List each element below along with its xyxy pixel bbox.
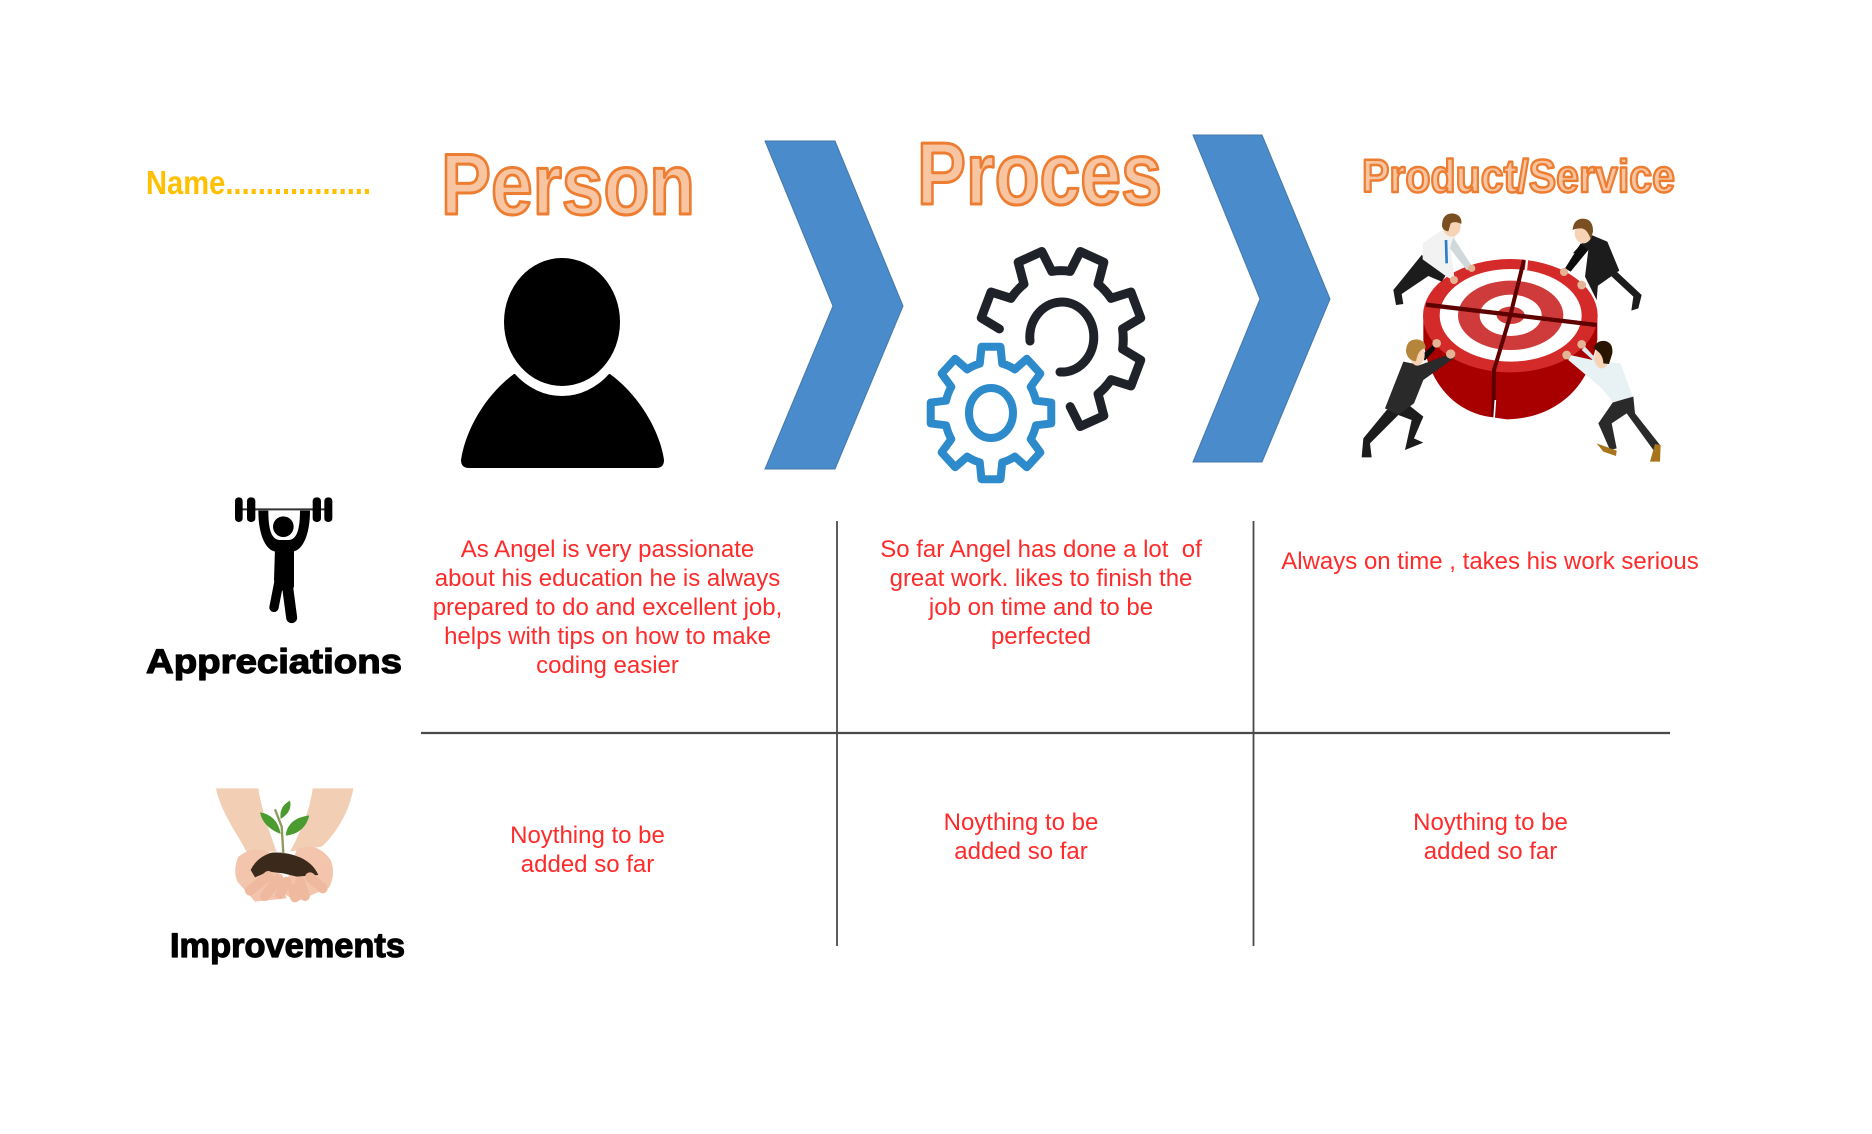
heading: Person: Person <box>441 137 695 233</box>
text: person appreciation: about his education he is always <box>435 565 780 592</box>
arrow: chevron two <box>1193 135 1330 462</box>
icon: team pushing target <box>1362 213 1661 462</box>
text: person appreciation: prepared to do and excellent job, <box>433 594 782 621</box>
text: person appreciation: As Angel is very passionate <box>461 536 754 563</box>
text: process appreciation: job on time and to be <box>928 594 1153 621</box>
text: process improvement: Noything to be <box>944 809 1098 836</box>
text: process appreciation: So far Angel has done a lot of <box>880 536 1202 563</box>
heading: Proces: Proces <box>917 124 1162 223</box>
text: product appreciation: Always on time , takes his work serious <box>1281 548 1699 575</box>
text: process appreciation: great work. likes to finish the <box>890 565 1192 592</box>
figure: bottom right man <box>1562 340 1661 462</box>
target face <box>1423 259 1598 420</box>
grid lines <box>421 521 1670 946</box>
arrow: chevron one <box>765 141 903 469</box>
text: person appreciation: helps with tips on how to make <box>444 623 771 650</box>
label: Improvements: Improvements <box>170 927 405 965</box>
text: person improvement: Noything to be <box>510 822 665 849</box>
name field: Name.................. <box>146 164 371 201</box>
text: person appreciation: coding easier <box>536 652 679 679</box>
icon: person silhouette <box>461 248 664 468</box>
text: person improvement: added so far <box>521 851 654 878</box>
icon: hands holding plant <box>216 788 353 902</box>
text: process appreciation: perfected <box>991 623 1091 650</box>
icon: weightlifter <box>235 497 332 618</box>
text: process improvement: added so far <box>954 838 1088 865</box>
icon: blue gear <box>931 347 1051 479</box>
icon: dark gear <box>961 223 1167 440</box>
figure: top right man <box>1560 219 1642 311</box>
figure: bottom left man <box>1362 339 1455 457</box>
heading: Product/Service: Product/Service <box>1362 150 1675 202</box>
figure: top left man <box>1393 213 1475 305</box>
label: Appreciations: Appreciations <box>146 643 402 681</box>
icon: gears <box>931 223 1167 479</box>
text: product improvement: added so far <box>1424 838 1557 865</box>
text: product improvement: Noything to be <box>1413 809 1568 836</box>
target body <box>1423 315 1597 419</box>
